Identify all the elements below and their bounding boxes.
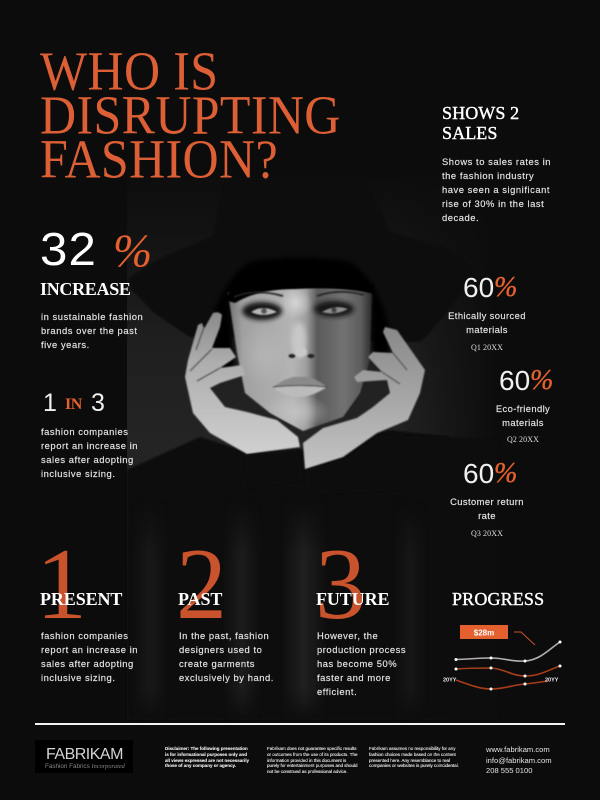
- callout arrow: [514, 632, 535, 645]
- stat: customer return: [450, 458, 524, 538]
- description: fashion companies: [41, 426, 129, 437]
- description: fashion companies: [41, 630, 129, 641]
- footer: contact: www.fabrikam.com: [486, 745, 550, 754]
- quarter: Q3 20XX: [471, 529, 503, 538]
- description: five years.: [41, 339, 90, 350]
- heading: FUTURE: [316, 589, 389, 609]
- description: [442, 156, 551, 223]
- figure: 60: [499, 365, 530, 396]
- description: sales after adopting: [41, 454, 134, 465]
- stat: ethically sourced: [448, 272, 526, 352]
- description: [41, 311, 143, 350]
- label: Eco-friendly: [496, 403, 550, 414]
- column: present: [36, 528, 138, 684]
- line: series 3: [456, 680, 548, 690]
- logo: Fabrikam: [35, 740, 133, 773]
- face shading: [252, 290, 326, 428]
- figure: 60: [463, 272, 494, 303]
- footer: disclaimer 2: Fabrikam does not guarantee specific results: [267, 746, 357, 751]
- footer: disclaimer 3: Fabrikam assumes no responsibility for any: [369, 746, 456, 751]
- percent: %: [494, 272, 516, 303]
- description: create garments: [179, 658, 255, 669]
- heading: PRESENT: [40, 589, 122, 609]
- figure: 60: [463, 458, 494, 489]
- description: In the past, fashion: [179, 630, 269, 641]
- sweater: [127, 430, 497, 720]
- axis labels: [443, 678, 559, 684]
- percent: %: [530, 365, 552, 396]
- divider: [35, 723, 565, 724]
- numeral: 2: [176, 528, 227, 641]
- footer: disclaimer 3: presented here. Any resemblance to real: [369, 758, 450, 763]
- description: inclusive sizing.: [41, 672, 115, 683]
- description: the fashion industry: [442, 170, 534, 181]
- footer: disclaimer 3: companies or websites is purely coincidental.: [369, 763, 459, 768]
- heading: progress: PROGRESS: [452, 589, 544, 609]
- description: rise of 30% in the last: [442, 198, 544, 209]
- footer: disclaimer 1: [165, 746, 249, 768]
- description: [41, 630, 138, 684]
- description: faster and more: [317, 672, 391, 683]
- footer: disclaimer 3: fashion choices made based on the content: [369, 752, 456, 757]
- footer: disclaimer 1: all views expressed are not necessarily: [165, 758, 249, 763]
- stat: 1 in 3: [41, 389, 138, 480]
- brows: [234, 292, 364, 297]
- eyes: [242, 301, 354, 320]
- description: [41, 426, 138, 480]
- heading: SHOWS 2: [442, 103, 519, 123]
- label: materials: [502, 417, 544, 428]
- description: designers used to: [179, 644, 262, 655]
- stat: 32% increase: [40, 223, 152, 350]
- numeral: 3: [315, 528, 366, 641]
- line: series 1: [454, 640, 562, 662]
- axis labels: 20YY: [443, 678, 457, 684]
- footer: disclaimer 1: Disclaimer: The following presentation: [165, 746, 248, 751]
- hat: [128, 178, 472, 342]
- footer: disclaimer 2: purely for entertainment purposes and should: [267, 763, 358, 768]
- footer: disclaimer 1: is for informational purposes only and: [165, 752, 247, 757]
- title: FASHION?: [40, 128, 278, 190]
- title: WHO IS: [40, 40, 218, 102]
- description: in sustainable fashion: [41, 311, 143, 322]
- description: [179, 630, 274, 684]
- description: report an increase in: [41, 440, 138, 451]
- description: efficient.: [317, 686, 357, 697]
- title: DISRUPTING: [40, 84, 341, 146]
- quarter: Q2 20XX: [507, 435, 539, 444]
- left hand: [185, 312, 300, 454]
- description: have seen a significant: [442, 184, 550, 195]
- column: past: [176, 528, 274, 684]
- axis labels: 20YY: [545, 678, 559, 684]
- figure: 1: [43, 389, 57, 417]
- figure 32: 32: [40, 223, 97, 275]
- label: [448, 310, 526, 335]
- quarter: Q1 20XX: [471, 343, 503, 352]
- label: Customer return: [450, 496, 524, 507]
- footer: disclaimer 2: [267, 746, 358, 774]
- description: However, the: [317, 630, 378, 641]
- label: [450, 496, 524, 521]
- label: Ethically sourced: [448, 310, 526, 321]
- tagline: Fashion Fabrics Incorporated: [45, 762, 125, 770]
- value tag: $28m: [474, 628, 494, 638]
- label: materials: [466, 324, 508, 335]
- lips: [273, 377, 327, 397]
- footer: contact: info@fabrikam.com: [486, 756, 552, 765]
- heading: [442, 103, 519, 143]
- description: brands over the past: [41, 325, 137, 336]
- wordmark: FABRIKAM: [46, 746, 123, 763]
- right hand: [303, 327, 425, 469]
- description: inclusive sizing.: [41, 468, 115, 479]
- percent: %: [494, 458, 516, 489]
- face: [228, 288, 372, 431]
- heading: SALES: [442, 123, 498, 143]
- description: decade.: [442, 212, 479, 223]
- description: sales after adopting: [41, 658, 134, 669]
- label: [496, 403, 550, 428]
- description: report an increase in: [41, 644, 138, 655]
- description: has become 50%: [317, 658, 397, 669]
- chart: progress lines: [443, 625, 562, 690]
- figure: 3: [91, 389, 105, 417]
- column: future: [315, 528, 406, 697]
- label: rate: [478, 510, 496, 521]
- footer: contact: 208 555 0100: [486, 766, 532, 775]
- nose: [292, 322, 306, 358]
- hair: [206, 257, 392, 375]
- cuffs: [240, 435, 450, 495]
- description: exclusively by hand.: [179, 672, 274, 683]
- line: series 2: [454, 664, 562, 678]
- photo: model in wide-brim hat: [127, 247, 462, 708]
- footer: disclaimer 2: or outcomes from the use of its products. The: [267, 752, 357, 757]
- footer: disclaimer 2: not be construed as professional advice.: [267, 769, 348, 774]
- description: production process: [317, 644, 406, 655]
- description: Shows to sales rates in: [442, 156, 551, 167]
- panel: shows 2 sales: [442, 103, 551, 223]
- heading: INCREASE: [40, 279, 131, 299]
- stat: eco-friendly: [496, 365, 552, 444]
- footer: contact: [486, 745, 552, 775]
- description: [317, 630, 406, 697]
- footer: disclaimer 3: [369, 746, 459, 768]
- IN: IN: [65, 396, 82, 413]
- bangs: [224, 283, 374, 303]
- heading: PAST: [178, 589, 222, 609]
- footer: disclaimer 2: information provided in this document is: [267, 758, 346, 763]
- footer: disclaimer 1: those of any company or agency.: [165, 763, 236, 768]
- title: [40, 40, 341, 190]
- percent sign: %: [113, 225, 152, 277]
- numeral: 1: [36, 528, 87, 641]
